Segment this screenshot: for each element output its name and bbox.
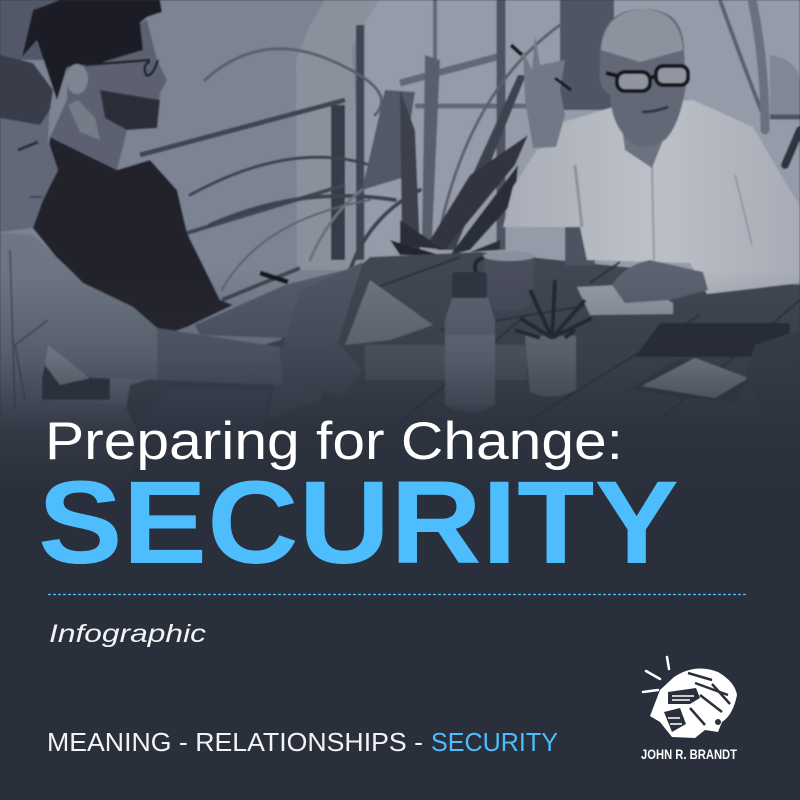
icon: head with hand on forehead — [650, 668, 737, 738]
mouth — [642, 107, 668, 112]
glasses — [85, 60, 158, 75]
logo name: JOHN R. BRANDT — [641, 746, 737, 762]
right edge hand — [745, 330, 800, 420]
hair — [0, 55, 53, 125]
person in dark shirt — [22, 0, 345, 340]
person left foreground — [0, 55, 362, 500]
heading: SECURITY: SECURITY — [38, 457, 679, 589]
background photo: team meeting — [0, 0, 800, 500]
dark gap under sleeve — [40, 345, 110, 400]
large plant — [190, 0, 800, 290]
glasses — [606, 66, 688, 91]
lower dark panel — [0, 489, 800, 800]
notebook — [577, 284, 673, 315]
logo: John R. Brandt — [641, 657, 737, 762]
neck opening — [620, 112, 668, 168]
hair — [22, 0, 162, 100]
laptop — [130, 262, 363, 430]
photo fade to dark — [0, 270, 800, 490]
title line: Preparing for Change: — [45, 412, 623, 471]
resting hand — [612, 260, 708, 303]
beard — [100, 90, 160, 130]
shirt — [503, 100, 800, 294]
head — [599, 9, 686, 147]
brick column — [560, 0, 614, 110]
face — [0, 100, 58, 232]
dashed divider — [48, 594, 747, 596]
potted succulent — [515, 280, 592, 397]
subtitle: Infographic — [49, 620, 207, 648]
raised hand — [523, 35, 565, 148]
series navigation: SECURITY — [431, 727, 558, 757]
wall — [0, 0, 800, 500]
shirt — [32, 137, 233, 340]
pen — [260, 273, 288, 282]
eye — [18, 142, 38, 150]
hand — [280, 345, 362, 395]
small paper — [345, 280, 433, 345]
ear — [66, 64, 88, 94]
forearm — [195, 270, 345, 338]
tablet — [627, 358, 752, 403]
person right: white shirt — [503, 9, 800, 294]
icon: rays — [643, 657, 669, 692]
neck and face — [50, 20, 167, 170]
chair shadow — [565, 225, 595, 265]
water bottle — [445, 272, 495, 412]
table — [110, 252, 800, 500]
shirt — [0, 233, 157, 500]
neck highlight — [68, 100, 100, 140]
mug — [475, 251, 535, 311]
series navigation: MEANING - RELATIONSHIPS - — [47, 727, 423, 757]
plaster column — [296, 0, 380, 270]
window frames and rails — [140, 0, 800, 300]
dark folder — [635, 323, 790, 357]
